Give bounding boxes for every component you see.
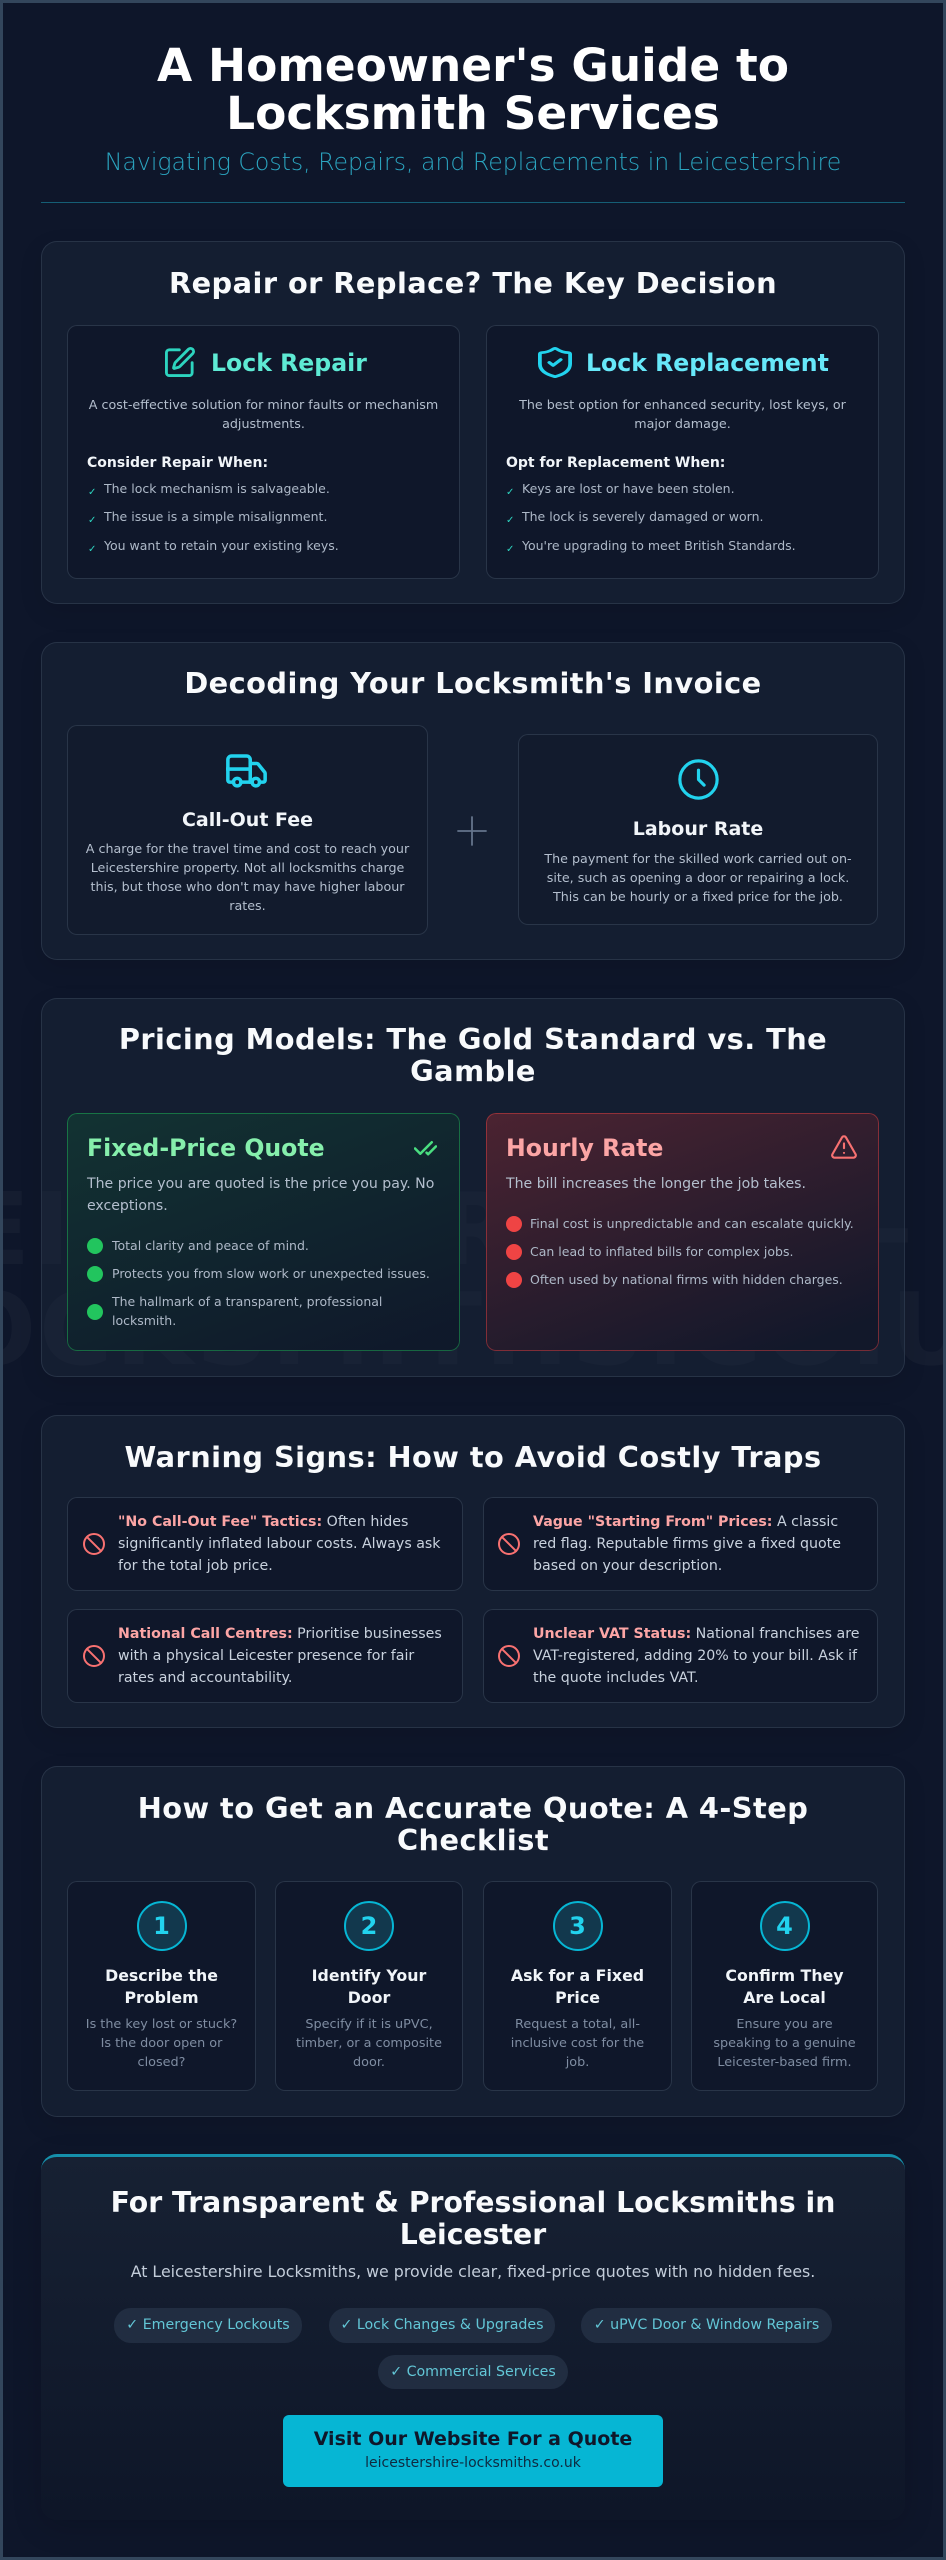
heading: repair or replace: Repair or Replace? The Key Decision xyxy=(169,266,777,300)
step description: Is the key lost or stuck? xyxy=(86,2016,237,2032)
step title xyxy=(511,1966,644,2007)
step number: 3 xyxy=(569,1912,586,1940)
pill: emergency lockouts xyxy=(114,2308,302,2343)
icon: ban xyxy=(83,1645,105,1667)
pill: lock changes: ✓ Lock Changes & Upgrades xyxy=(340,2317,544,2333)
warning text: Unclear VAT Status: National franchises are xyxy=(533,1626,859,1642)
checklist: ✓ xyxy=(88,515,96,526)
heading: lock replacement: Lock Replacement xyxy=(586,348,829,376)
list: benefits: locksmith. xyxy=(112,1313,176,1328)
icon: shield check xyxy=(538,347,572,378)
step number: 4 xyxy=(776,1912,793,1940)
step 2 xyxy=(275,1881,463,2091)
step description xyxy=(713,2016,856,2070)
step number xyxy=(552,1901,602,1951)
step description: door. xyxy=(353,2054,385,2070)
button title: Visit Our Website For a Quote xyxy=(314,2428,632,2450)
description xyxy=(544,850,852,904)
step description xyxy=(511,2016,644,2070)
step title: Problem xyxy=(124,1988,199,2007)
step title: Door xyxy=(348,1988,390,2007)
icon: truck xyxy=(226,754,267,788)
heading: checklist: How to Get an Accurate Quote: A 4-Step xyxy=(138,1791,808,1825)
checklist: You're upgrading to meet British Standards. xyxy=(522,538,796,552)
description: site, such as opening a door or repairing a lock. xyxy=(547,870,849,884)
step description: timber, or a composite xyxy=(296,2036,442,2050)
checklist: The lock is severely damaged or worn. xyxy=(522,509,764,524)
step description xyxy=(86,2016,237,2070)
checklist: ✓ xyxy=(88,544,96,555)
step 3 xyxy=(483,1881,672,2091)
title: A Homeowner's Guide to xyxy=(157,39,789,92)
pill: upvc repairs: ✓ uPVC Door & Window Repairs xyxy=(594,2317,819,2333)
step title: Are Local xyxy=(743,1988,826,2007)
heading: labour rate: Labour Rate xyxy=(633,818,763,840)
step description: Request a total, all- xyxy=(515,2016,640,2032)
heading: hourly rate: Hourly Rate xyxy=(506,1134,663,1162)
step description: job. xyxy=(566,2054,589,2070)
step number xyxy=(344,1901,394,1951)
warning text: based on your description. xyxy=(533,1558,722,1574)
heading: warning signs: Warning Signs: How to Avoid Costly Traps xyxy=(124,1440,822,1474)
subheading: Consider Repair When: xyxy=(87,454,268,470)
description xyxy=(86,840,410,912)
pill: commercial services: ✓ Commercial Services xyxy=(390,2364,556,2380)
button url: leicestershire-locksmiths.co.uk xyxy=(365,2454,581,2470)
checklist: ✓ xyxy=(88,487,96,498)
checklist: ✓ xyxy=(506,515,514,526)
description: rates. xyxy=(229,898,266,912)
checklist: The lock mechanism is salvageable. xyxy=(104,481,330,496)
step description: closed? xyxy=(138,2054,185,2070)
icon: clock xyxy=(678,759,719,800)
description: exceptions. xyxy=(87,1198,168,1214)
heading: invoice: Decoding Your Locksmith's Invoice xyxy=(184,666,762,700)
step title: Ask for a Fixed xyxy=(511,1966,644,1985)
warning text: Vague "Starting From" Prices: A classic xyxy=(533,1514,838,1530)
heading: call-out fee: Call-Out Fee xyxy=(182,809,313,831)
heading: checklist: Checklist xyxy=(397,1823,549,1857)
warning: no call-out fee xyxy=(67,1497,463,1591)
list: risks: Can lead to inflated bills for complex jobs. xyxy=(530,1244,793,1259)
step description: Specify if it is uPVC, xyxy=(305,2016,433,2032)
warning text: National Call Centres: Prioritise businesses xyxy=(118,1626,442,1642)
warning: national call centres xyxy=(67,1609,463,1703)
step number: 1 xyxy=(153,1912,170,1940)
heading: fixed-price: Fixed-Price Quote xyxy=(87,1134,325,1162)
warning text xyxy=(118,1626,442,1686)
warning text xyxy=(533,1514,841,1574)
description: A charge for the travel time and cost to reach your xyxy=(86,840,409,856)
list: benefits: Protects you from slow work or unexpected issues. xyxy=(112,1266,430,1281)
step title: Describe the xyxy=(105,1966,218,1985)
icon: edit xyxy=(165,347,195,377)
description: The best option for enhanced security, lost keys, or xyxy=(519,396,846,412)
subheading: Opt for Replacement When: xyxy=(506,454,725,470)
list: benefits: Total clarity and peace of mind. xyxy=(112,1238,309,1253)
pill: upvc repairs xyxy=(581,2308,832,2343)
heading: call to action xyxy=(111,2186,835,2251)
description: major damage. xyxy=(634,416,731,431)
checklist xyxy=(88,481,339,555)
step description: inclusive cost for the xyxy=(511,2036,644,2050)
step title xyxy=(312,1966,426,2007)
description: This can be hourly or a fixed price for the job. xyxy=(553,888,843,904)
heading: lock repair: Lock Repair xyxy=(211,348,367,376)
step number: 2 xyxy=(361,1912,377,1940)
watermark xyxy=(0,1180,946,1380)
warning text: rates and accountability. xyxy=(118,1670,292,1686)
step 4 xyxy=(691,1881,878,2091)
heading: pricing models: Pricing Models: The Gold Standard vs. The xyxy=(119,1022,827,1056)
panel: warning signs xyxy=(41,1415,905,1728)
description: this, but those who don't may have higher labour xyxy=(90,878,405,894)
card: lock repair xyxy=(67,325,460,579)
pill: commercial services xyxy=(378,2355,568,2389)
warning text: for the total job price. xyxy=(118,1558,273,1574)
heading: checklist xyxy=(138,1791,808,1857)
heading: call to action: Leicester xyxy=(400,2218,546,2251)
card: fixed-price quote xyxy=(67,1113,460,1351)
button: visit website xyxy=(283,2415,663,2487)
warning text xyxy=(533,1626,859,1686)
pill: emergency lockouts: ✓ Emergency Lockouts xyxy=(126,2317,290,2333)
list: risks: Final cost is unpredictable and can escalate quickly. xyxy=(530,1216,854,1231)
checklist: Keys are lost or have been stolen. xyxy=(522,481,735,496)
panel: quote checklist xyxy=(41,1766,905,2117)
warning: starting from prices xyxy=(483,1497,878,1591)
checklist: The issue is a simple misalignment. xyxy=(104,509,327,524)
list: risks: Often used by national firms with hidden charges. xyxy=(530,1272,843,1287)
warning text xyxy=(118,1514,441,1574)
icon: ban xyxy=(498,1533,520,1555)
subtitle: Navigating Costs, Repairs, and Replacements in Leicestershire xyxy=(105,148,841,176)
icon: double check xyxy=(414,1140,437,1156)
warning text: with a physical Leicester presence for fair xyxy=(118,1648,414,1664)
card: hourly rate xyxy=(486,1113,879,1351)
description: adjustments. xyxy=(222,416,305,431)
description xyxy=(86,1176,434,1214)
heading: pricing models xyxy=(119,1022,827,1088)
step number xyxy=(760,1901,810,1951)
step title: Identify Your xyxy=(312,1966,426,1985)
step title xyxy=(725,1966,844,2007)
heading: call to action: For Transparent & Professional Locksmiths in xyxy=(111,2186,835,2219)
panel: call to action xyxy=(41,2154,905,2520)
step title: Price xyxy=(555,1988,600,2007)
checklist: ✓ xyxy=(506,544,514,555)
pill: lock changes xyxy=(329,2308,555,2343)
list: benefits xyxy=(87,1238,430,1328)
warning text: the quote includes VAT. xyxy=(533,1670,698,1686)
step description: Leicester-based firm. xyxy=(717,2054,852,2070)
warning text: red flag. Reputable firms give a fixed quote xyxy=(533,1536,841,1552)
list: risks xyxy=(506,1216,854,1288)
icon: plus xyxy=(457,816,487,846)
subheading: At Leicestershire Locksmiths, we provide clear, fixed-price quotes with no hidden fees. xyxy=(131,2262,815,2281)
description: Leicestershire property. Not all locksmiths charge xyxy=(91,860,404,874)
description: The bill increases the longer the job takes. xyxy=(506,1176,806,1192)
checklist: ✓ xyxy=(506,487,514,498)
step title: Confirm They xyxy=(725,1966,844,1985)
title: Locksmith Services xyxy=(226,87,720,140)
warning text: "No Call-Out Fee" Tactics: Often hides xyxy=(118,1514,408,1530)
step 1 xyxy=(67,1881,256,2091)
icon: ban xyxy=(83,1533,105,1555)
heading: pricing models: Gamble xyxy=(410,1054,536,1088)
description xyxy=(88,396,438,431)
warning: unclear vat xyxy=(483,1609,878,1703)
description: The payment for the skilled work carried out on- xyxy=(544,850,852,866)
card: call-out fee xyxy=(67,725,428,935)
panel: repair or replace xyxy=(41,241,905,604)
step description: speaking to a genuine xyxy=(713,2036,856,2050)
panel: pricing models xyxy=(41,998,905,1377)
step description xyxy=(296,2016,442,2070)
description xyxy=(519,396,846,431)
step description: Ensure you are xyxy=(736,2016,833,2032)
checklist xyxy=(506,481,796,555)
warning text: significantly inflated labour costs. Always ask xyxy=(118,1536,441,1552)
description: A cost-effective solution for minor faults or mechanism xyxy=(89,396,438,412)
icon: ban xyxy=(498,1645,520,1667)
description: The price you are quoted is the price you pay. No xyxy=(87,1176,434,1192)
panel: invoice xyxy=(41,642,905,960)
list: benefits: The hallmark of a transparent, professional xyxy=(112,1294,382,1309)
warning text: VAT-registered, adding 20% to your bill. Ask if xyxy=(533,1648,857,1664)
step description: Is the door open or xyxy=(101,2036,222,2050)
checklist: You want to retain your existing keys. xyxy=(104,538,339,552)
step title xyxy=(105,1966,218,2007)
card: labour rate xyxy=(518,734,878,925)
step number xyxy=(136,1901,186,1951)
card: lock replacement xyxy=(486,325,879,579)
icon: warning xyxy=(831,1135,857,1159)
title xyxy=(157,39,789,140)
